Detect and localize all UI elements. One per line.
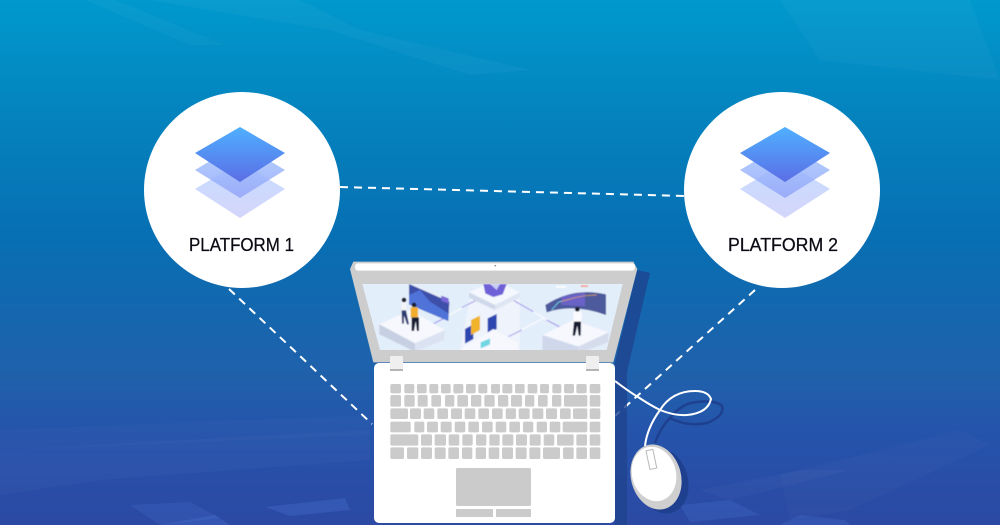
left platform: [379, 310, 445, 343]
keyboard: [390, 384, 600, 459]
label: platform 1: PLATFORM 1: [189, 234, 294, 255]
right platform: [542, 320, 609, 347]
laptop shadow: [615, 270, 650, 525]
mouse cable: [615, 381, 711, 446]
icon: layers: [740, 127, 830, 218]
right curved display: [545, 292, 606, 315]
person: woman: [402, 298, 409, 324]
center top platform: [470, 284, 519, 299]
screen illustration: [362, 284, 622, 350]
webcam: [494, 265, 496, 266]
mouse shadow: [630, 443, 696, 519]
dashed connector: platform 2 to laptop: [615, 290, 755, 416]
center cards: [465, 324, 473, 344]
label: platform 2: PLATFORM 2: [728, 234, 838, 255]
laptop base: [374, 363, 615, 523]
icon: layers: [195, 127, 285, 218]
mouse wheel: [646, 449, 657, 469]
left chart board: [409, 284, 449, 321]
dashed connector: platform 1 to laptop: [229, 289, 372, 424]
mouse body: [623, 439, 689, 515]
panel: platform 2: [684, 92, 880, 288]
trackpad: [456, 468, 531, 517]
person: man in yellow: [411, 303, 419, 331]
person: man in white: [573, 307, 582, 336]
laptop lid: [350, 262, 637, 362]
mouse: [615, 381, 722, 519]
panel: platform 1: [144, 92, 340, 288]
lid top bar: [355, 263, 635, 271]
laptop hinges: [390, 356, 599, 371]
center lower platform: [462, 329, 518, 352]
dashed connector: platform 1 to platform 2: [340, 187, 686, 196]
